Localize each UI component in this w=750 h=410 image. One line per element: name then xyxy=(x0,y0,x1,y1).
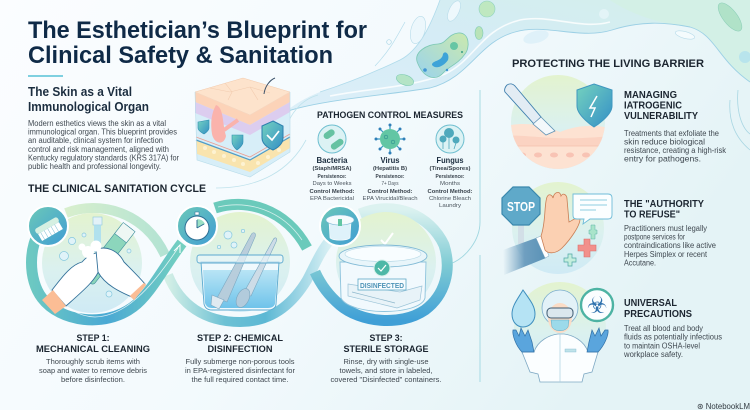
icon: bacteria xyxy=(318,125,346,153)
column: bacteria: (Staph/MRSA) xyxy=(312,166,352,172)
column: bacteria: EPA Bactericidal xyxy=(310,196,354,202)
column: virus: Control Method: xyxy=(368,189,413,195)
panel outline: pathogen control xyxy=(450,90,480,382)
heading: clinical sanitation cycle: THE CLINICAL SANITATION CYCLE xyxy=(28,183,206,195)
column: bacteria: Control Method: xyxy=(310,189,355,195)
step 1 illustration: gloved hands washing xyxy=(42,213,145,314)
step 3 illustration: disinfected container: DISINFECTED xyxy=(360,281,405,290)
column: fungus: Months xyxy=(440,181,460,187)
text block: managing iatrogenic vulnerability: skin reduce biological xyxy=(624,138,705,146)
illustration: protected practitioner xyxy=(512,282,608,382)
text block: managing iatrogenic vulnerability: resistance, creating a high-risk xyxy=(624,146,726,155)
icon: virus xyxy=(374,124,406,154)
text block: skin as a vital immunological organ: an auditable, clinical system for infection xyxy=(28,136,163,145)
column: fungus: Chlorine Bleach xyxy=(429,196,471,202)
step 1 text: MECHANICAL CLEANING xyxy=(36,344,150,354)
step 3 text xyxy=(330,333,442,384)
column: fungus: Laundry xyxy=(439,203,461,209)
icon: stopwatch badge xyxy=(177,206,217,246)
icon: scrub brush badge xyxy=(28,206,68,246)
column: virus: Virus xyxy=(380,155,400,165)
text block: managing iatrogenic vulnerability: IATROGENIC xyxy=(624,100,682,112)
step 2 text: the full required contact time. xyxy=(192,375,288,384)
title: Clinical Safety & Sanitation xyxy=(28,42,333,69)
text block: universal precautions: UNIVERSAL xyxy=(624,298,677,309)
column: virus: EPA Virucidal/Bleach xyxy=(362,196,418,202)
step 2 text: in EPA-registered disinfectant for xyxy=(185,366,295,375)
column: bacteria: Days to Weeks xyxy=(312,181,352,187)
step 3 illustration: disinfected container xyxy=(336,212,436,312)
column: fungus: Persistence: xyxy=(436,174,465,180)
text block: authority to refuse: Herpes Simplex or recent xyxy=(624,250,708,259)
text block: authority to refuse: TO REFUSE" xyxy=(624,210,680,220)
title xyxy=(28,17,367,69)
step 2 text xyxy=(185,333,295,384)
text block: skin as a vital immunological organ: Kentucky regulatory standards (KRS 317A) for xyxy=(28,153,179,162)
illustration: skin cross-section cube xyxy=(195,78,290,177)
text block: skin as a vital immunological organ: Modern esthetics views the skin as a vital xyxy=(28,119,166,128)
step 3 text: covered "Disinfected" containers. xyxy=(330,375,442,384)
text block: authority to refuse: Practitioners must legally xyxy=(624,224,707,233)
text block: skin as a vital immunological organ: public health and professional longevity. xyxy=(28,162,161,171)
text block: skin as a vital immunological organ: The Skin as a Vital xyxy=(28,85,132,99)
column: bacteria: Bacteria xyxy=(316,155,348,165)
illustration: exfoliation tool on skin with shield xyxy=(505,75,612,175)
column: bacteria: Persistence: xyxy=(318,174,347,180)
step 1 text xyxy=(36,333,150,384)
step 3 text: towels, and store in labeled, xyxy=(340,366,432,375)
column: virus: Persistence: xyxy=(376,174,405,180)
step 2 illustration: disinfectant basin with tools xyxy=(190,212,290,312)
text block: authority to refuse: postpone services for xyxy=(624,233,685,242)
step 2 text: Fully submerge non-porous tools xyxy=(186,357,295,366)
step 2 text: DISINFECTION xyxy=(208,344,273,354)
column: fungus: Control Method: xyxy=(428,189,473,195)
title: The Esthetician’s Blueprint for xyxy=(28,17,367,44)
icon: biohazard badge xyxy=(581,289,613,321)
column: fungus xyxy=(428,155,473,209)
column: virus: 7+ Days xyxy=(382,181,399,187)
icon: container badge xyxy=(320,206,360,246)
step 1 text: soap and water to remove debris xyxy=(39,366,147,375)
illustration: stop sign and raised hand xyxy=(502,182,612,275)
decorative top fluid band with cells xyxy=(216,0,750,188)
text block: authority to refuse: Accutane. xyxy=(624,258,656,267)
step 2 text: STEP 2: CHEMICAL xyxy=(197,333,283,343)
text block: authority to refuse: contraindications like active xyxy=(624,241,716,250)
text block: skin as a vital immunological organ xyxy=(28,85,179,171)
icon: fungus xyxy=(436,125,464,153)
icon: large cell xyxy=(417,33,468,78)
column: bacteria xyxy=(310,155,355,202)
step 3 text: STERILE STORAGE xyxy=(344,344,428,354)
column: fungus: (Tinea/Spores) xyxy=(430,166,471,172)
text block: authority to refuse: THE "AUTHORITY xyxy=(624,199,704,210)
heading: protecting the living barrier: PROTECTING THE LIVING BARRIER xyxy=(512,58,704,70)
text block: universal precautions: Treat all blood and body xyxy=(624,324,703,333)
chart: sanitation cycle ribbon xyxy=(32,204,447,322)
column: virus: (Hepatitis B) xyxy=(373,166,407,172)
text block: universal precautions: workplace safety. xyxy=(623,350,683,359)
heading: pathogen control: PATHOGEN CONTROL MEASURES xyxy=(317,109,463,120)
text block: universal precautions: PRECAUTIONS xyxy=(624,309,692,320)
text block: skin as a vital immunological organ: Immunological Organ xyxy=(28,100,149,114)
illustration: stop sign and raised hand: STOP xyxy=(507,199,535,214)
text block: managing iatrogenic vulnerability: MANAGING xyxy=(624,90,677,101)
text block: skin as a vital immunological organ: immunological organ. This blueprint provides xyxy=(28,128,177,137)
step 3 text: STEP 3: xyxy=(370,333,402,343)
text block: skin as a vital immunological organ: control and risk management, aligned with xyxy=(28,145,169,154)
text block: managing iatrogenic vulnerability: VULNERABILITY xyxy=(624,111,698,122)
step 3 text: Rinse, dry with single-use xyxy=(344,357,428,366)
text block: managing iatrogenic vulnerability: entry for pathogens. xyxy=(624,154,701,164)
panel: pathogen control measures xyxy=(310,109,473,209)
step 1 text: before disinfection. xyxy=(61,375,125,384)
step 1 text: Thoroughly scrub items with xyxy=(46,357,140,366)
icon: biohazard badge: ☣ xyxy=(587,293,607,319)
step 1 text: STEP 1: xyxy=(76,333,110,343)
text block: authority to refuse xyxy=(624,199,716,267)
column: virus xyxy=(362,155,418,202)
column: fungus: Fungus xyxy=(436,155,464,165)
text block: universal precautions: to maintain OSHA-level xyxy=(624,341,700,350)
text block: universal precautions: fluids as potentially infectious xyxy=(624,333,722,342)
text block: universal precautions xyxy=(623,298,722,359)
text block: managing iatrogenic vulnerability: Treatments that exfoliate the xyxy=(624,129,719,138)
text block: managing iatrogenic vulnerability xyxy=(624,90,726,164)
